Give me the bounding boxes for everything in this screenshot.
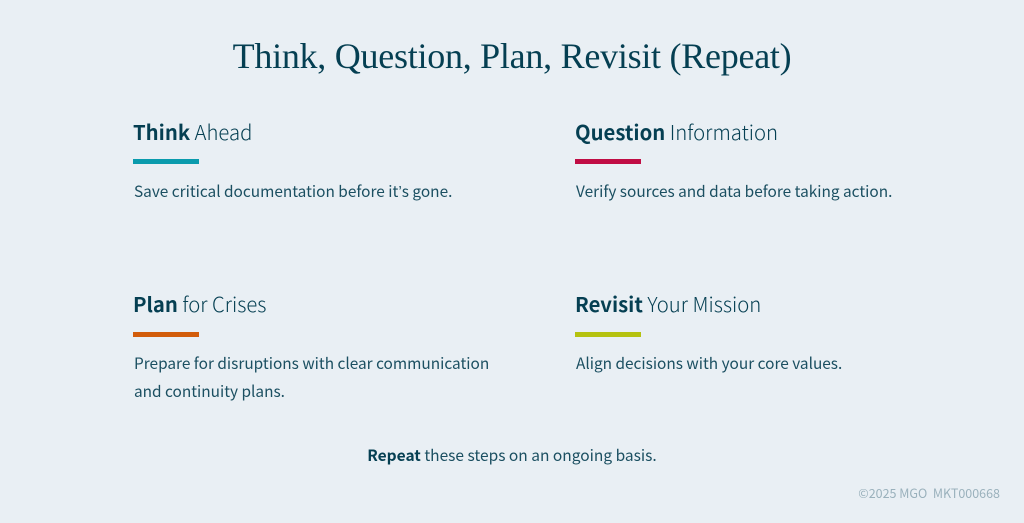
text: revisit your mission description: Align decisions with your core values.: [576, 352, 842, 374]
panel: think ahead: [133, 116, 452, 202]
orange accent bar: [133, 332, 199, 337]
text: think ahead description: Save critical documentation before it’s gone.: [134, 180, 452, 202]
heading: question information: Question Information: [575, 116, 778, 146]
text: plan for crises description: Prepare for disruptions with clear communication: [134, 352, 489, 374]
copyright footer: ©2025 MGO MKT000668: [858, 483, 1000, 502]
closing statement: Repeat these steps on an ongoing basis.: [367, 444, 657, 466]
lime accent bar: [575, 332, 641, 337]
title: Think, Question, Plan, Revisit (Repeat): [233, 36, 791, 76]
heading: revisit your mission: Revisit Your Mission: [575, 288, 761, 318]
text: question information description: Verify sources and data before taking action.: [576, 180, 892, 202]
heading: think ahead: Think Ahead: [133, 116, 252, 146]
panel: plan for crises: [133, 288, 489, 402]
heading: plan for crises: Plan for Crises: [133, 288, 266, 318]
text: plan for crises description: and continuity plans.: [134, 380, 285, 402]
text: plan for crises description: [134, 352, 489, 402]
teal accent bar: [133, 159, 199, 164]
crimson accent bar: [575, 159, 641, 164]
panel: question information: [575, 116, 892, 202]
panel: revisit your mission: [575, 288, 842, 374]
